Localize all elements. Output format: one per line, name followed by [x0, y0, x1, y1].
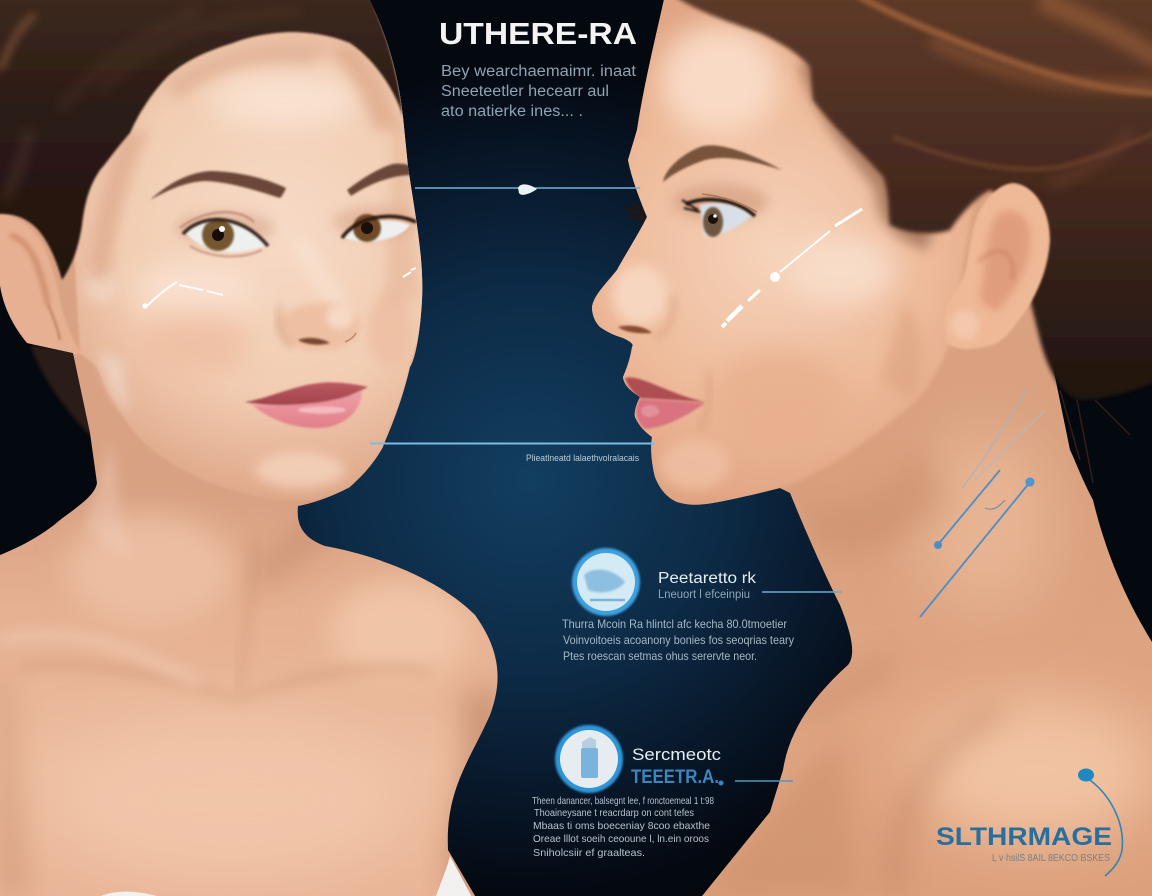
- neck tech needles: [920, 388, 1045, 617]
- icon: pretreatment circle: [572, 548, 640, 616]
- left neck and chest: [0, 440, 500, 896]
- title: UTHERE-RA: [439, 16, 637, 51]
- right ear: [945, 183, 1050, 349]
- middle connector line and label: Plieatlneatd lalaethvolralacais: [526, 453, 639, 464]
- panel: pretreatment text: Lneuort l efceinpiu: [658, 589, 750, 601]
- logo: Althermage on shoulder: SLTHRMAGE: [936, 823, 1112, 851]
- left lips: [245, 382, 368, 428]
- right cheek tech marks: [722, 209, 862, 327]
- right neck and shoulder: [700, 430, 1152, 896]
- right eye: [672, 184, 768, 237]
- panel: serum text: Sniholcsiir ef graalteas.: [533, 847, 645, 859]
- panel: pretreatment text: Voinvoitoeis acoanony bonies fos seoqrias teary: [563, 633, 794, 647]
- panel: serum text: [532, 745, 793, 859]
- panel: serum text: Theen danancer, balsegnt lee, f ronctoemeal 1 t:98: [532, 795, 714, 807]
- logo: Althermage on shoulder: [936, 768, 1122, 876]
- panel: serum text: Oreae lllot soeih ceooune l, ln.ein oroos: [533, 833, 709, 845]
- left cheek tech marks: [142, 268, 416, 309]
- left eyes: [175, 206, 417, 256]
- left hair behind ear: [30, 345, 95, 440]
- left eyebrows: [150, 164, 415, 200]
- right hair: [664, 0, 1152, 483]
- right lips: [625, 377, 706, 429]
- intro text block: Sneeteetler hecearr aul: [441, 83, 609, 100]
- left white towel: [92, 856, 474, 896]
- left face: [60, 10, 430, 501]
- right woman far-eye lashes: [625, 204, 648, 220]
- left hair: [0, 0, 403, 280]
- intro text block: [441, 63, 637, 120]
- panel: pretreatment text: Thurra Mcoin Ra hlintcl afc kecha 80.0tmoetier: [562, 617, 787, 631]
- right eyebrow: [663, 145, 782, 182]
- right woman portrait: [580, 0, 1152, 896]
- intro text block: ato natierke ines... .: [441, 103, 583, 120]
- panel: pretreatment text: [562, 570, 842, 663]
- panel: serum text: Mbaas ti oms boeceniay 8coo ebaxthe: [533, 820, 710, 832]
- panel: serum text: Sercmeotc: [632, 745, 722, 764]
- intro text block: Bey wearchaemaimr. inaat: [441, 63, 637, 80]
- right face: [592, 0, 973, 505]
- left nose: [278, 240, 360, 350]
- right hair highlights: [857, 0, 1152, 483]
- icon: serum bottle circle: [555, 725, 623, 793]
- panel: serum text: Thoaineysane t reacrdarp on cont tefes: [534, 807, 694, 819]
- left woman portrait: [0, 0, 515, 896]
- right nose shadow: [618, 295, 710, 430]
- top connector arrow: [415, 184, 640, 195]
- left ear: [0, 215, 82, 356]
- panel: pretreatment text: Ptes roescan setmas ohus serervte neor.: [563, 649, 757, 663]
- panel: pretreatment text: Peetaretto rk: [658, 570, 756, 587]
- logo: Althermage on shoulder: L v hsilS 8AIL 8EKCO BSKES: [992, 852, 1110, 864]
- panel: serum text: TEEETR.A.: [631, 767, 719, 788]
